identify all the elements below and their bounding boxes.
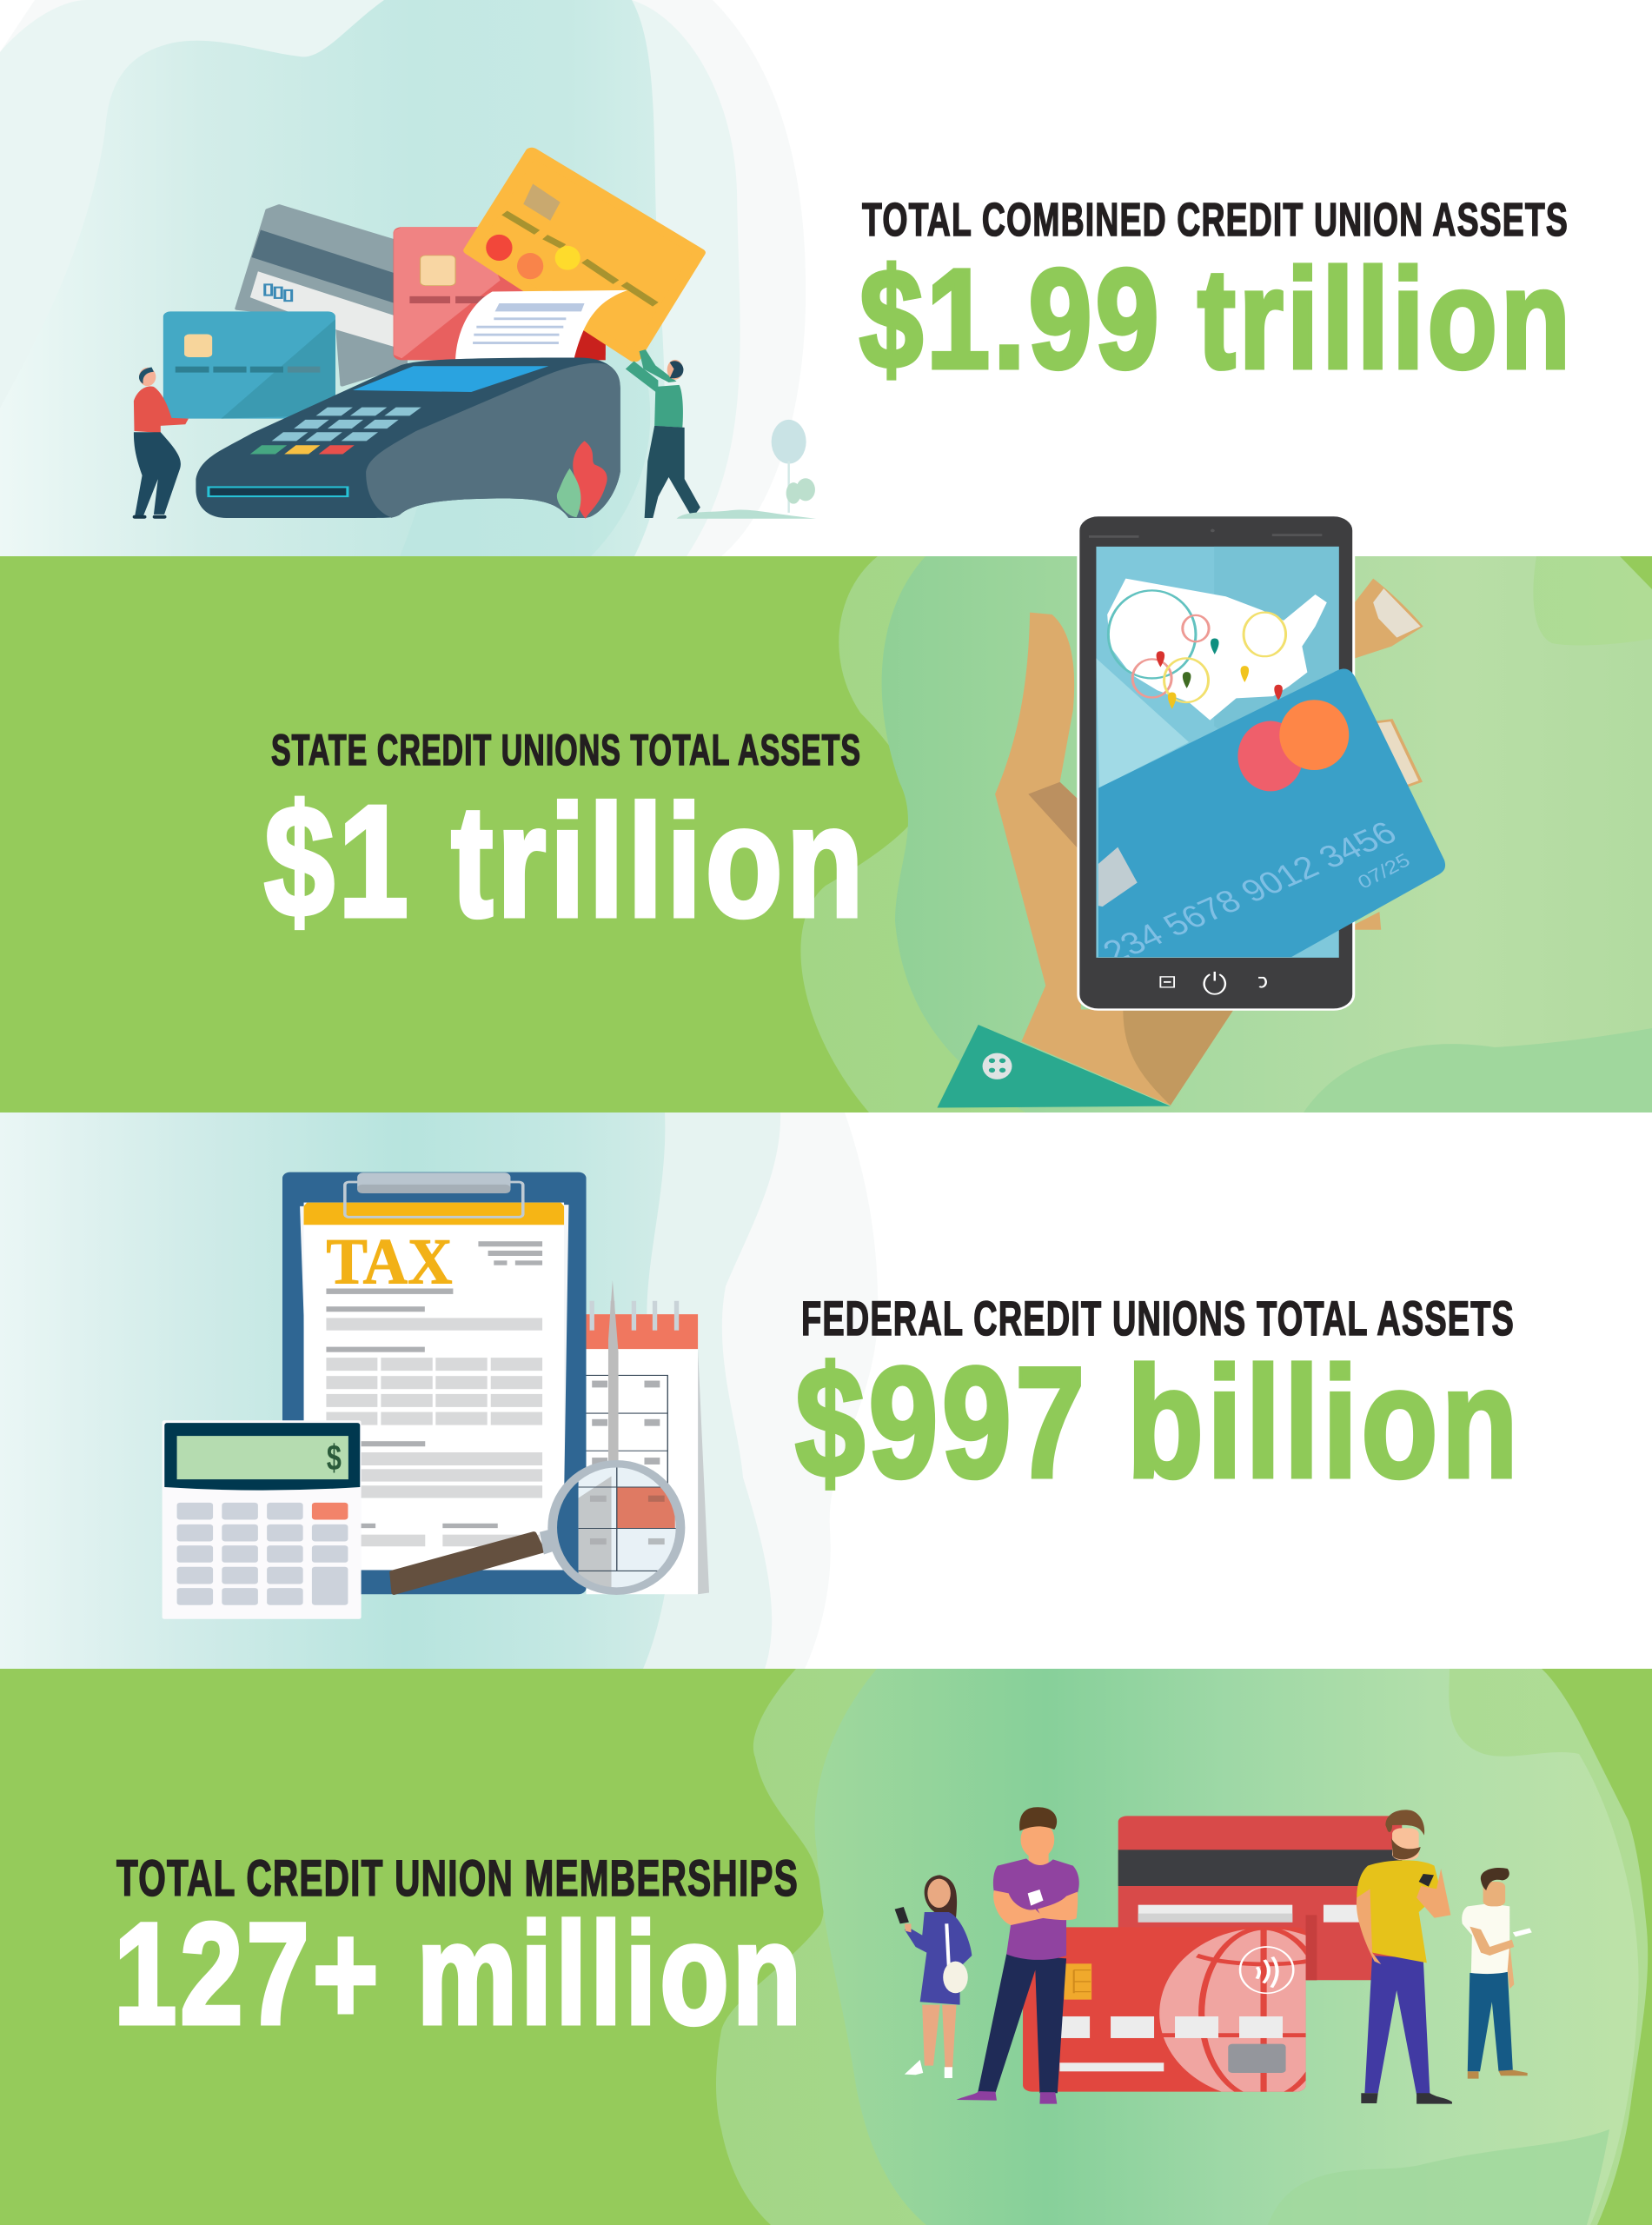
magnifying glass <box>392 1464 680 1592</box>
grey credit card <box>237 206 406 385</box>
icon: map pins <box>1157 638 1283 709</box>
shirt cuff <box>937 1025 1171 1108</box>
hand: palm and thumb <box>995 613 1234 1106</box>
panel: state credit unions <box>0 515 1652 1112</box>
panel: total combined assets <box>0 0 1652 556</box>
person: left holding card <box>133 367 189 519</box>
yellow credit card <box>469 152 700 357</box>
phone body <box>1078 515 1354 1010</box>
front credit card <box>1023 1927 1368 2099</box>
icon: tree and ground <box>677 420 816 519</box>
credit card over phone <box>1096 669 1445 969</box>
form: field lines <box>326 1241 542 1546</box>
calendar <box>587 1280 709 1594</box>
panel: federal credit unions <box>0 1112 1652 1669</box>
red credit card <box>394 227 606 360</box>
panel: total memberships <box>0 1669 1652 2225</box>
person: bearded man in yellow <box>1357 1810 1452 2104</box>
form: TAX heading: TAX <box>326 1225 453 1298</box>
receipt <box>455 290 627 359</box>
calculator <box>163 1420 362 1619</box>
stat: 127+ million: 127+ million <box>114 1894 805 2055</box>
person: right pushing card <box>626 349 700 518</box>
stat: 1 trillion: $1 trillion <box>264 772 867 950</box>
back credit card <box>1118 1816 1402 1980</box>
illustration: tax form with calculator <box>163 1172 709 1619</box>
blue credit card <box>163 311 335 419</box>
illustration: payment terminal with cards <box>133 152 816 519</box>
person: man in white shirt <box>1462 1868 1532 2079</box>
person: woman with phone <box>895 1875 972 2078</box>
illustration: hand holding phone and card <box>937 515 1445 1108</box>
calculator: $ <box>327 1438 342 1478</box>
clipboard <box>282 1172 587 1594</box>
hand: fingers behind phone <box>1352 579 1423 930</box>
phone buttons <box>1160 972 1266 994</box>
illustration: people with credit cards <box>895 1807 1532 2104</box>
payment terminal <box>196 357 620 518</box>
heading: total credit union memberships: TOTAL CREDIT UNION MEMBERSHIPS <box>116 1850 799 1907</box>
credit card over phone: 07/25 <box>1352 851 1416 893</box>
person: man in purple <box>957 1807 1079 2104</box>
heading: state credit unions total assets: STATE CREDIT UNIONS TOTAL ASSETS <box>271 726 861 774</box>
credit card over phone: 234 5678 9012 3456 <box>1096 814 1403 969</box>
phone screen with map <box>1096 547 1339 958</box>
icon: leaves <box>557 441 607 519</box>
